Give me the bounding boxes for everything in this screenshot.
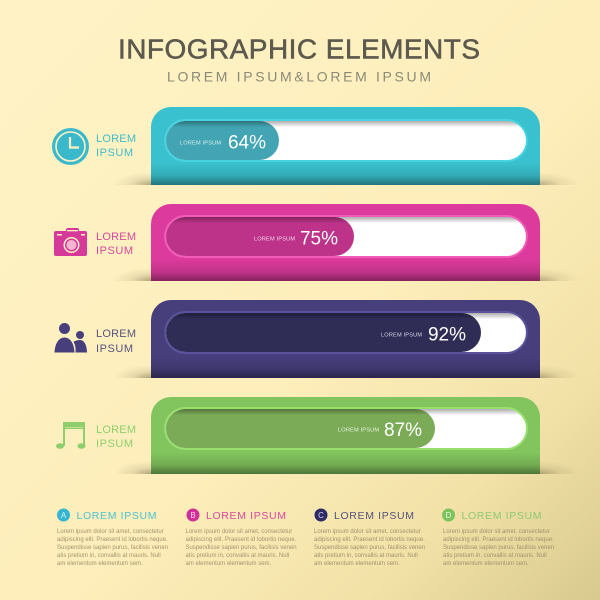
row 1 caption: LOREM <box>96 133 136 145</box>
row 3 caption: IPSUM <box>96 343 133 355</box>
text block B: adipiscing elit. Praesent id lobortis neque. <box>186 537 297 543</box>
value: 75% <box>300 228 338 250</box>
legend B: LOREM IPSUM <box>206 510 286 522</box>
legend D <box>442 508 554 567</box>
text block A: Lorem ipsum dolor sit amet, consectetur <box>57 529 164 535</box>
legend A <box>57 508 168 567</box>
value: 87% <box>384 420 422 441</box>
legend D: D <box>446 511 452 520</box>
legend C: LOREM IPSUM <box>334 510 414 522</box>
icon: camera <box>54 228 87 256</box>
text block C: am elementum elementum sem. <box>314 561 400 567</box>
row 2: magenta progress bar <box>113 204 580 281</box>
text block C: atis pretium in, convallis at mauris. Null <box>314 553 418 559</box>
icon: music note <box>56 422 86 449</box>
text block C <box>314 529 425 567</box>
row 3 caption: LOREM <box>96 328 136 340</box>
label: LOREM IPSUM <box>254 236 295 242</box>
text block C: Lorem ipsum dolor sit amet, consectetur <box>314 529 421 535</box>
value: 64% <box>228 132 266 154</box>
text block A: am elementum elementum sem. <box>57 561 143 567</box>
text block D: Lorem ipsum dolor sit amet, consectetur <box>443 529 550 535</box>
row 1 caption <box>96 133 136 159</box>
legend A: A <box>61 511 67 520</box>
legend C: C <box>318 511 324 520</box>
text block D: am elementum elementum sem. <box>443 561 529 567</box>
text block D: atis pretium in, convallis at mauris. Null <box>443 553 547 559</box>
text block C: adipiscing elit. Praesent id lobortis neque. <box>314 537 425 543</box>
legend D: LOREM IPSUM <box>462 510 542 522</box>
label: LOREM IPSUM <box>381 332 422 338</box>
text block B: Suspendisse sapien purus, facilisis venen <box>186 545 297 551</box>
row 2 caption: IPSUM <box>96 245 133 257</box>
icon: clock <box>52 128 89 165</box>
row 4 caption <box>96 424 136 450</box>
text block D <box>443 529 554 567</box>
title: INFOGRAPHIC ELEMENTS <box>118 34 480 64</box>
text block B: atis pretium in, convallis at mauris. Null <box>186 553 289 559</box>
row 3 caption <box>96 328 136 355</box>
row 3: indigo progress bar <box>113 300 580 378</box>
text block A: adipiscing elit. Praesent id lobortis neque. <box>57 537 168 543</box>
value: 92% <box>428 324 466 346</box>
text block C: Suspendisse sapien purus, facilisis venen <box>314 545 425 551</box>
legend C <box>314 508 425 567</box>
text block D: adipiscing elit. Praesent id lobortis neque. <box>443 537 554 543</box>
text block A: atis pretium in, convallis at mauris. Null <box>57 553 161 559</box>
label: LOREM IPSUM <box>180 140 221 146</box>
legend A: LOREM IPSUM <box>76 510 156 522</box>
row 4: green progress bar <box>113 397 580 474</box>
legend B: B <box>190 511 196 520</box>
text block B <box>186 529 297 567</box>
text block A <box>57 529 168 567</box>
row 4 caption: LOREM <box>96 424 136 436</box>
row 1: teal progress bar <box>113 107 580 185</box>
row 1 caption: IPSUM <box>96 147 133 159</box>
legend B <box>186 508 297 567</box>
subtitle: LOREM IPSUM&LOREM IPSUM <box>167 68 431 84</box>
icon: people <box>54 323 87 352</box>
text block A: Suspendisse sapien purus, facilisis venen <box>57 545 168 551</box>
row 2 caption <box>96 231 136 257</box>
row 2 caption: LOREM <box>96 231 136 243</box>
text block B: Lorem ipsum dolor sit amet, consectetur <box>186 529 292 535</box>
text block D: Suspendisse sapien purus, facilisis venen <box>443 545 554 551</box>
text block B: am elementum elementum sem. <box>186 561 272 567</box>
row 4 caption: IPSUM <box>96 438 133 450</box>
label: LOREM IPSUM <box>338 428 379 434</box>
